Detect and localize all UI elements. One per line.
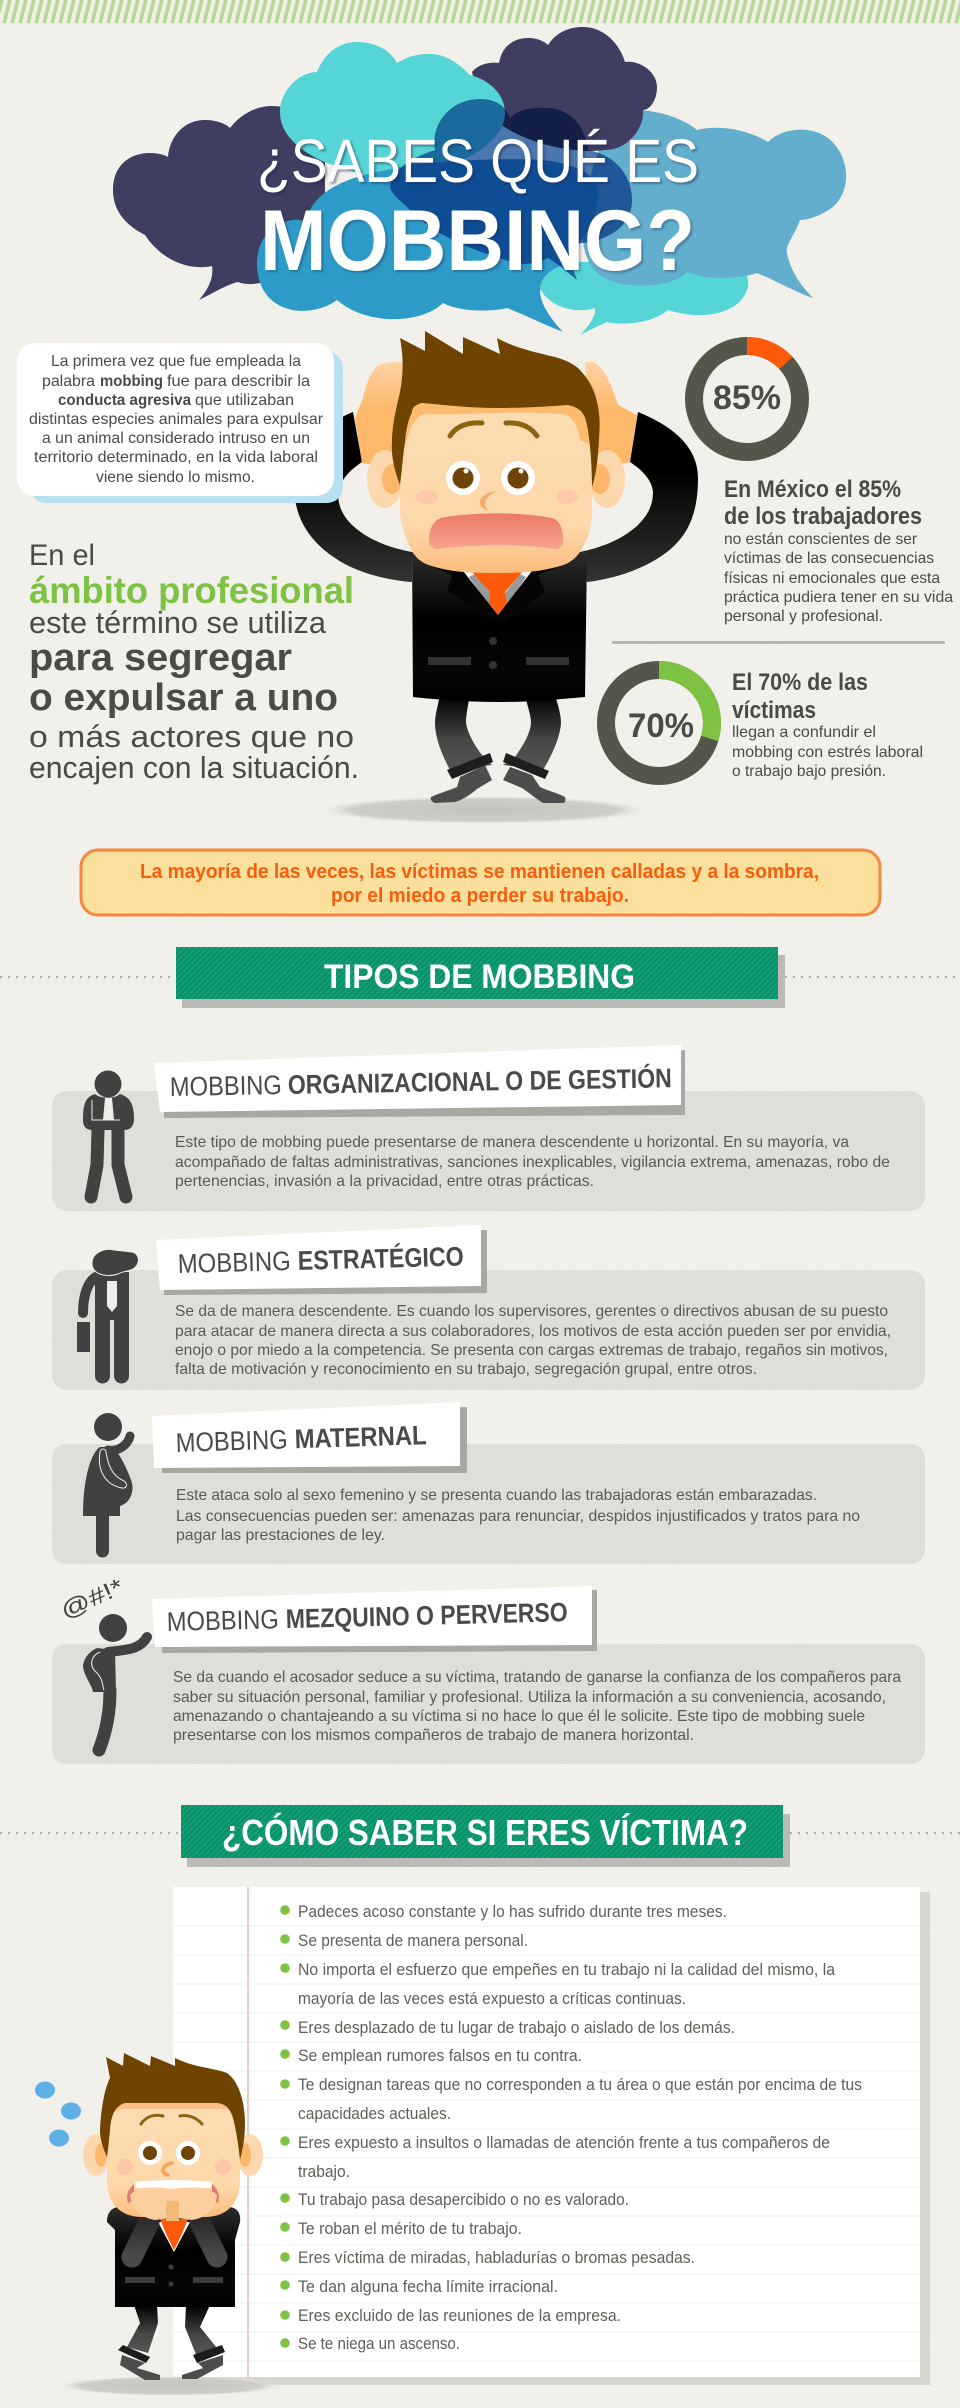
panel text: amenazando o chantajeando a su víctima si no hace lo que él le solicite. Este tipo de mobbing suele xyxy=(173,1708,865,1725)
callout: La mayoría de las veces, las víctimas se mantienen calladas y a la sombra, xyxy=(140,861,819,883)
legs xyxy=(435,695,561,770)
stat text: 70%: El 70% de las xyxy=(732,669,868,696)
donut chart: 70% xyxy=(606,670,712,776)
donut chart: 85% xyxy=(694,346,800,452)
box shadow xyxy=(30,352,343,503)
panel text: acompañado de faltas administrativas, sanciones inexplicables, vigilancia extrema, amenazas, robo de xyxy=(175,1154,890,1171)
left statement: ámbito profesional xyxy=(29,539,359,785)
ruled lines xyxy=(173,1926,920,2361)
label xyxy=(156,1225,481,1290)
figure: hunched with briefcase xyxy=(77,1250,138,1384)
banner: cómo saber si eres víctima: ¿CÓMO SABER SI ERES VÍCTIMA? xyxy=(222,1811,748,1853)
list text: Eres excluido de las reuniones de la empresa. xyxy=(298,2307,621,2325)
speech bubble cluster xyxy=(113,27,846,335)
jacket buttons and pockets xyxy=(428,637,569,669)
list text: trabajo. xyxy=(298,2163,350,2181)
title line 1: ¿SABES QUÉ ES xyxy=(257,127,699,195)
cuffs xyxy=(118,2345,225,2363)
banner: tipos de mobbing: TIPOS DE MOBBING xyxy=(324,958,635,996)
hair xyxy=(100,2053,245,2160)
label xyxy=(152,1402,460,1468)
small nervous character xyxy=(83,2053,263,2380)
panel text: presentarse con los mismos compañeros de trabajo de manera horizontal. xyxy=(173,1727,694,1744)
left statement: ámbito profesional: o expulsar a uno xyxy=(29,677,338,719)
stat text: 85% xyxy=(724,476,953,625)
list text: mayoría de las veces está expuesto a críticas continuas. xyxy=(298,1990,686,2008)
list text: Eres víctima de miradas, habladurías o bromas pesadas. xyxy=(298,2249,695,2267)
callout: por el miedo a perder su trabajo. xyxy=(331,885,629,907)
stat text: 70%: llegan a confundir el xyxy=(732,724,876,741)
label text: MOBBING xyxy=(166,1604,279,1637)
stat text: 70%: mobbing con estrés laboral xyxy=(732,744,923,761)
panel text: para atacar de manera directa a sus colaboradores, los motivos de esta acción pueden ser por envidia, xyxy=(175,1323,891,1340)
ears xyxy=(83,2134,263,2176)
list text: Se emplean rumores falsos en tu contra. xyxy=(298,2047,582,2065)
small character shadow xyxy=(58,2376,282,2396)
label text: ORGANIZACIONAL O DE GESTIÓN xyxy=(288,1062,672,1100)
stat text: 85%: En México el 85% xyxy=(724,476,901,503)
stat text: 85%: de los trabajadores xyxy=(724,503,922,530)
stat text: 85%: víctimas de las consecuencias xyxy=(724,550,934,567)
label shadow xyxy=(162,1590,597,1653)
icon: sweat drops xyxy=(35,2082,81,2146)
list text xyxy=(298,1903,862,2353)
label shadow xyxy=(162,1407,467,1473)
jacket xyxy=(107,2207,240,2307)
shirt collar and tie xyxy=(433,567,558,623)
label text: MOBBING xyxy=(175,1424,288,1458)
stat text: 85%: personal y profesional. xyxy=(724,608,883,625)
list text: Se presenta de manera personal. xyxy=(298,1932,528,1950)
label text: MATERNAL xyxy=(294,1420,427,1454)
box text: fue para describir la xyxy=(167,373,310,390)
banner: cómo saber si eres víctima xyxy=(181,1805,790,1867)
bubble: light blue right xyxy=(583,110,846,298)
list text: Te dan alguna fecha límite irracional. xyxy=(298,2278,558,2296)
shirt and tie xyxy=(158,2219,190,2252)
list text: Tu trabajo pasa desapercibido o no es valorado. xyxy=(298,2191,629,2209)
bubble: dark top right xyxy=(472,27,657,151)
title line 2: MOBBING? xyxy=(260,193,695,289)
label xyxy=(152,1586,592,1647)
label text xyxy=(175,1420,427,1458)
box text: viene siendo lo mismo. xyxy=(96,469,255,486)
face xyxy=(107,2103,240,2217)
panel text: pagar las prestaciones de ley. xyxy=(176,1527,385,1544)
sleeves xyxy=(132,2222,217,2257)
hair xyxy=(392,331,600,487)
stat text: 70%: víctimas xyxy=(732,697,816,724)
face xyxy=(400,403,592,573)
main character xyxy=(295,331,698,803)
panel: organizacional xyxy=(52,1045,925,1211)
grawlix symbols: @#!* xyxy=(56,1573,127,1624)
list text: Te roban el mérito de tu trabajo. xyxy=(298,2220,522,2238)
box text: a un animal considerado intruso en un xyxy=(42,430,310,447)
ears xyxy=(367,450,625,508)
stat text: 70% xyxy=(732,669,923,780)
top stripe band xyxy=(0,0,960,23)
box text: que utilizaban xyxy=(195,392,294,409)
box text: mobbing xyxy=(100,373,163,390)
label xyxy=(154,1045,681,1112)
label text: MOBBING xyxy=(177,1246,291,1279)
donut chart: 70%: 70% xyxy=(628,707,694,745)
donut chart: 85%: 85% xyxy=(713,379,781,417)
panel text: Este tipo de mobbing puede presentarse de manera descendente u horizontal. En su mayoría, va xyxy=(175,1134,849,1151)
figure: shouting person xyxy=(83,1614,147,1750)
figure: pregnant woman xyxy=(83,1413,132,1558)
panel text xyxy=(176,1487,860,1544)
hands xyxy=(355,362,637,470)
left statement: ámbito profesional: encajen con la situación. xyxy=(29,750,359,785)
label shadow xyxy=(164,1050,685,1118)
left statement: ámbito profesional: este término se utiliza xyxy=(29,605,327,640)
panel text xyxy=(173,1669,901,1744)
stat text: 85%: físicas ni emocionales que esta xyxy=(724,570,940,587)
title xyxy=(257,127,699,289)
arms xyxy=(295,412,698,582)
panel: maternal xyxy=(52,1402,925,1564)
panel text: Se da cuando el acosador seduce a su víctima, tratando de ganarse la confianza de los compañeros para xyxy=(173,1669,901,1686)
box text: palabra xyxy=(42,373,95,390)
label text xyxy=(177,1241,464,1279)
box text: conducta agresiva xyxy=(58,392,191,409)
list text: Padeces acoso constante y lo has sufrido durante tres meses. xyxy=(298,1903,727,1921)
label text xyxy=(166,1597,568,1637)
list text: Te designan tareas que no corresponden a tu área o que están por encima de tus xyxy=(298,2076,862,2094)
panel text xyxy=(175,1134,890,1190)
panel text: Se da de manera descendente. Es cuando los supervisores, gerentes o directivos abusan de su puesto xyxy=(175,1303,888,1320)
character shadow xyxy=(319,796,649,824)
left statement: ámbito profesional: En el xyxy=(29,539,95,572)
label text: ESTRATÉGICO xyxy=(297,1241,464,1276)
list text: Se te niega un ascenso. xyxy=(298,2335,460,2353)
box text: La primera vez que fue empleada la xyxy=(51,353,301,370)
panel text: Las consecuencias pueden ser: amenazas para renunciar, despidos injustificados y tratos para no xyxy=(176,1508,860,1525)
panel text: saber su situación personal, familiar y profesional. Utiliza la información a su conveniencia, acosando, xyxy=(173,1689,886,1706)
left statement: ámbito profesional: ámbito profesional xyxy=(29,570,354,611)
bubble: medium blue xyxy=(257,159,598,332)
panel: mezquino o perverso xyxy=(52,1573,925,1764)
stat text: 85%: no están conscientes de ser xyxy=(724,531,918,548)
left statement: ámbito profesional: o más actores que no xyxy=(29,719,354,754)
bubble: navy overlap xyxy=(390,99,632,280)
label shadow xyxy=(164,1230,487,1295)
text box: first use of the word xyxy=(17,343,343,503)
label text: MEZQUINO O PERVERSO xyxy=(285,1597,568,1634)
box text xyxy=(29,353,324,486)
hands xyxy=(130,2187,217,2221)
callout xyxy=(81,850,880,915)
panel text: enojo o por miedo a la competencia. Se presenta con cargas extremas de trabajo, regaños sin motivos, xyxy=(175,1342,888,1359)
legs xyxy=(127,2305,217,2357)
list text: capacidades actuales. xyxy=(298,2105,451,2123)
shoes xyxy=(431,765,565,803)
shoes xyxy=(120,2355,223,2380)
jacket buttons and pockets xyxy=(125,2264,223,2286)
panel text xyxy=(175,1303,891,1378)
notebook page xyxy=(173,1887,920,2377)
jacket xyxy=(412,552,587,702)
bubble: turquoise top xyxy=(280,42,505,180)
left statement: ámbito profesional: para segregar xyxy=(29,637,292,679)
box text: territorio determinado, en la vida laboral xyxy=(34,449,318,466)
list text: Eres expuesto a insultos o llamadas de atención frente a tus compañeros de xyxy=(298,2134,830,2152)
cuffs xyxy=(447,753,549,779)
panel text: Este ataca solo al sexo femenino y se presenta cuando las trabajadoras están embarazadas. xyxy=(176,1487,817,1504)
stat text: 70%: o trabajo bajo presión. xyxy=(732,763,886,780)
notebook shadow xyxy=(183,1892,930,2385)
banner: tipos de mobbing xyxy=(176,947,785,1008)
list text: No importa el esfuerzo que empeñes en tu trabajo ni la calidad del mismo, la xyxy=(298,1961,836,1979)
list text: Eres desplazado de tu lugar de trabajo o aislado de los demás. xyxy=(298,2019,735,2037)
box text: distintas especies animales para expulsar xyxy=(29,411,324,428)
notebook checklist xyxy=(173,1887,930,2385)
panel text: falta de motivación y reconocimiento en su trabajo, segregación grupal, entre otros. xyxy=(175,1361,757,1378)
bubble: dark left xyxy=(113,106,325,300)
panel: estratégico xyxy=(52,1225,925,1390)
box xyxy=(17,343,334,496)
stat text: 85%: práctica pudiera tener en su vida xyxy=(724,589,953,606)
figure: folded arms xyxy=(83,1070,134,1197)
label text xyxy=(170,1062,672,1102)
bubble: turquoise bottom xyxy=(540,262,748,335)
label text: MOBBING xyxy=(170,1070,282,1102)
panel text: pertenencias, invasión a la privacidad, entre otras prácticas. xyxy=(175,1173,594,1190)
bullets xyxy=(280,1905,290,2348)
